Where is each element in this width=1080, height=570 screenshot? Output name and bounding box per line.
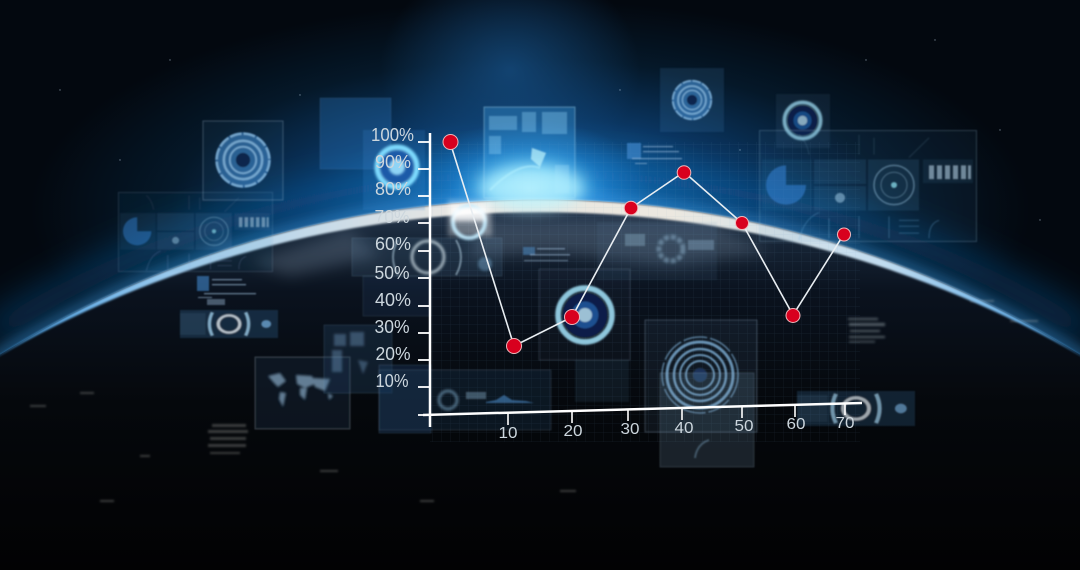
glow: atmosphere above limb <box>0 174 1080 335</box>
panel: dark square top center-left <box>320 98 391 169</box>
y axis labels: 30% <box>374 317 410 337</box>
panel: world map <box>255 357 350 429</box>
panels layer <box>118 68 976 467</box>
panel: horizontal HUD left <box>180 310 278 338</box>
x axis labels: 60 <box>786 416 806 433</box>
panel: dim tile map centre left <box>324 325 392 393</box>
panel: dim tile below ring <box>575 360 629 402</box>
panel: overlapping tile below rings <box>660 373 754 467</box>
x axis labels: 70 <box>836 415 855 432</box>
panel: ring gauge upper left <box>203 121 283 200</box>
x axis labels: 40 <box>674 420 694 437</box>
panel: dashboard left <box>118 192 273 272</box>
x axis labels: 20 <box>564 423 583 440</box>
data points <box>443 134 850 354</box>
cloud and city lights texture <box>30 222 1038 502</box>
panel: dashboard right <box>760 130 976 242</box>
limb highlight <box>0 200 1080 361</box>
y axis labels: 90% <box>375 152 411 172</box>
x axis labels <box>498 415 855 442</box>
line chart <box>371 125 862 442</box>
y axis labels: 80% <box>375 179 411 199</box>
panel: ring gauge with glow at 90 percent <box>363 130 425 210</box>
panel: large concentric rings <box>645 320 757 432</box>
panel: code lines right <box>848 318 885 342</box>
data line <box>450 142 844 346</box>
y axis labels: 20% <box>376 344 410 364</box>
glow: bright core over tile <box>480 166 584 210</box>
x axis labels: 10 <box>498 425 518 442</box>
y axis <box>418 133 430 427</box>
grid panel behind chart <box>430 142 860 442</box>
y axis labels <box>371 125 414 391</box>
panel: HUD bottom right <box>797 391 915 426</box>
x axis labels: 50 <box>734 418 754 435</box>
panel: large tile top center <box>484 107 575 198</box>
panel: code lines left <box>197 276 256 305</box>
y axis labels: 100% <box>371 125 414 145</box>
y axis labels: 70% <box>374 207 410 227</box>
panel: tile column beside y-axis <box>379 365 431 433</box>
y axis labels: 60% <box>375 234 411 254</box>
x axis labels: 30 <box>620 421 640 438</box>
panel: wide chart tile bottom <box>379 370 551 430</box>
y axis labels: 10% <box>376 371 408 391</box>
panel: code lines under limb <box>523 247 570 261</box>
panel: dim tile beside 50 percent <box>363 276 431 316</box>
panel: dim dashboard under limb <box>597 222 717 280</box>
panel: HUD across axis <box>352 238 502 276</box>
panel: dark ring gauge center <box>539 269 630 360</box>
panel: code lines centre <box>627 143 682 164</box>
panel: small glowing ring top right <box>776 94 830 148</box>
panel: ring gauge top <box>660 68 724 132</box>
x axis <box>423 403 862 425</box>
y axis labels: 50% <box>374 263 410 283</box>
y axis labels: 40% <box>375 290 411 310</box>
planet earth <box>0 200 1080 570</box>
panel: bright ring on limb <box>448 200 492 238</box>
glow: sunrise behind the planet <box>410 120 650 260</box>
